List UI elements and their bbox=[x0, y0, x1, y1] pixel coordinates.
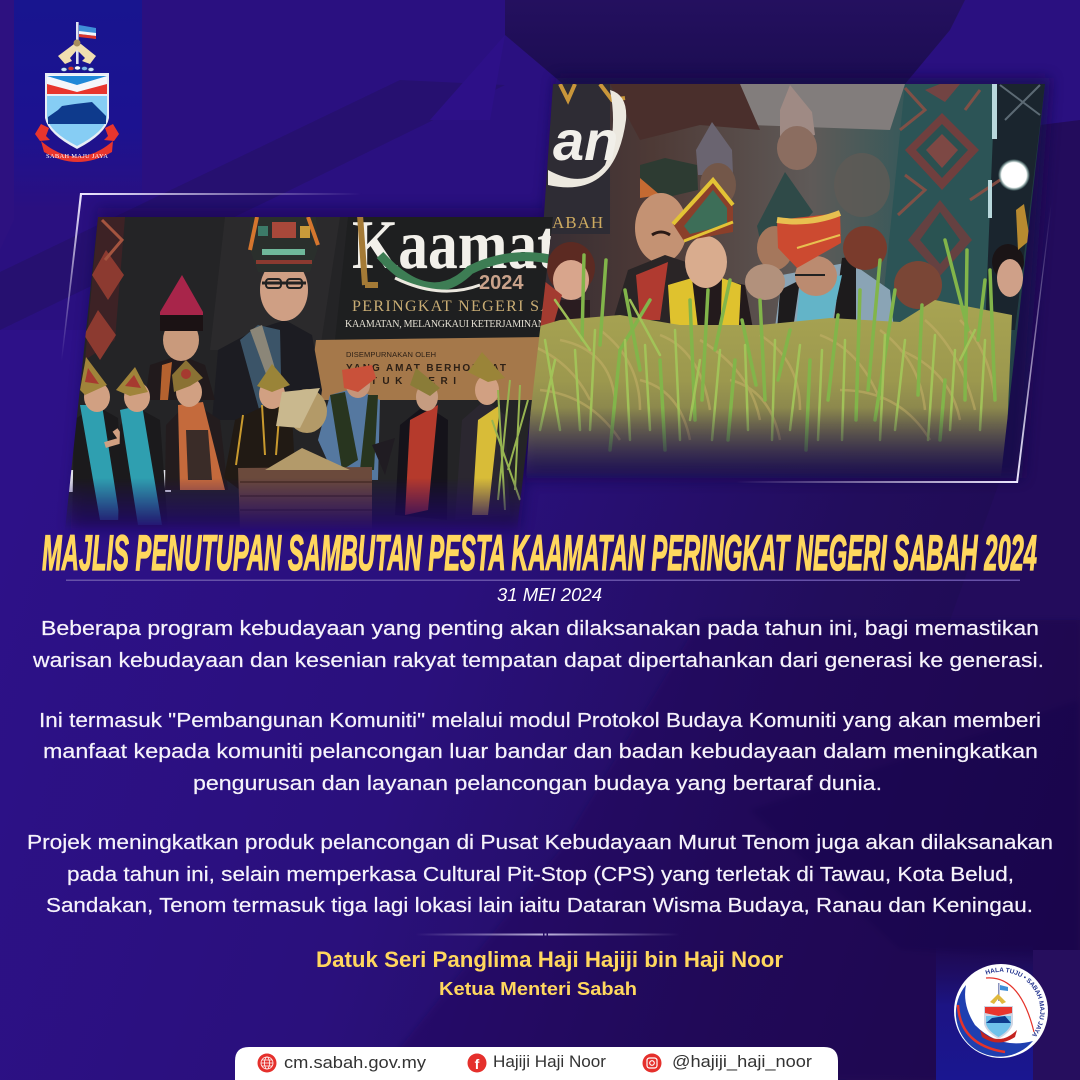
paragraph 2: Ini termasuk "Pembangunan Komuniti" melalui modul Protokol Budaya Komuniti yang akan memberi bbox=[39, 710, 1041, 732]
rice sieve bbox=[276, 388, 327, 433]
left woman bbox=[540, 242, 595, 326]
paragraph 1: Beberapa program kebudayaan yang penting akan dilaksanakan pada tahun ini, bagi memastikan bbox=[41, 618, 1039, 640]
paragraph 3: pada tahun ini, selain memperkasa Cultural Pit-Stop (CPS) yang terletak di Tawau, Kota Belud, bbox=[67, 864, 1014, 886]
paragraph 1: warisan kebudayaan dan kesenian rakyat tempatan dapat dipertahankan dari generasi ke generasi. bbox=[32, 650, 1044, 672]
emblem: Sabah coat of arms bbox=[35, 22, 119, 162]
banner: Kaamat bbox=[352, 207, 557, 284]
banner: DISEMPURNAKAN OLEH bbox=[346, 350, 436, 359]
paragraph 3: Projek meningkatkan produk pelancongan di Pusat Kebudayaan Murut Tenom juga akan dilaksanakan bbox=[27, 832, 1053, 854]
photo: Prime Minister at rice ceremony bbox=[60, 207, 560, 530]
photo shadows bbox=[70, 78, 1050, 530]
photo: frame outline right bbox=[735, 202, 1052, 483]
paragraph 1 bbox=[32, 618, 1044, 672]
rice field bbox=[520, 300, 1012, 480]
facebook text: Hajiji Haji Noor bbox=[493, 1052, 606, 1071]
leader in yellow sash bbox=[668, 177, 752, 325]
title underline bbox=[66, 580, 1020, 581]
screen figure: Prime Minister bbox=[212, 217, 322, 420]
speaker name: Datuk Seri Panglima Haji Hajiji bin Haji Noor bbox=[316, 947, 783, 972]
banner bbox=[314, 217, 551, 400]
stage light bbox=[998, 159, 1030, 191]
photo: rice harvest with leaders bbox=[520, 80, 1050, 480]
footer contact bar bbox=[235, 1047, 838, 1080]
divider bbox=[415, 934, 680, 936]
guest 2 bbox=[116, 367, 168, 530]
instagram text: @hajiji_haji_noor bbox=[672, 1052, 812, 1071]
guest 4 bbox=[224, 364, 295, 490]
banner: KAAMATAN, MELANGKAUI KETERJAMINAN bbox=[345, 319, 545, 330]
screen logo text bbox=[548, 84, 626, 232]
right girl bbox=[992, 204, 1030, 297]
guest 3 bbox=[165, 360, 228, 490]
panel: top-left blue banner bbox=[14, 0, 142, 210]
date: 31 MEI 2024 bbox=[497, 585, 602, 605]
icon: instagram bbox=[642, 1054, 662, 1072]
paragraph 3 bbox=[27, 832, 1053, 917]
banner: 2024 bbox=[479, 272, 524, 294]
rice basket bbox=[238, 448, 372, 530]
paragraph 3: Sandakan, Tenom termasuk tiga lagi lokasi lain iaitu Dataran Wisma Budaya, Ranau dan Keningau. bbox=[46, 895, 1033, 917]
icon: website globe bbox=[258, 1054, 276, 1072]
screen logo text: ABAH bbox=[552, 213, 604, 232]
screen logo text: an bbox=[553, 109, 618, 172]
banner: PERINGKAT NEGERI SA bbox=[352, 298, 552, 315]
guest 7 bbox=[458, 352, 508, 515]
panel: bottom-right blue banner bbox=[936, 945, 1033, 1080]
icon: facebook bbox=[468, 1054, 486, 1072]
paragraph 2: pengurusan dan layanan pelancongan budaya yang bertaraf dunia. bbox=[193, 773, 882, 795]
photo: frame outline left bbox=[61, 193, 362, 362]
screen figures bbox=[610, 85, 890, 340]
leader in batik bbox=[745, 210, 942, 324]
rice stalks bbox=[492, 380, 528, 510]
emblem: Sabah coat of arms: SABAH MAJU JAYA bbox=[46, 153, 108, 160]
guest 1 bbox=[72, 357, 120, 520]
banner: YANG AMAT BERHORMAT bbox=[346, 363, 506, 374]
paragraph 2: manfaat kepada komuniti pelancongan luar bandar dan badan kebudayaan dalam meningkatkan bbox=[43, 741, 1038, 763]
guest 5 pouring bbox=[318, 365, 380, 480]
guest 6 bbox=[372, 368, 448, 520]
badge: Hala Tuju Sabah Maju Jaya bbox=[954, 964, 1048, 1058]
speaker role: Ketua Menteri Sabah bbox=[439, 979, 637, 999]
banner: DATUK SERI bbox=[346, 376, 456, 387]
badge: Hala Tuju Sabah Maju Jaya: HALA TUJU • SABAH MAJU JAYA bbox=[985, 968, 1045, 1036]
icon: facebook: f bbox=[475, 1056, 480, 1072]
textile diamonds bbox=[898, 84, 1000, 276]
screen figure: second man bbox=[145, 275, 215, 400]
website text: cm.sabah.gov.my bbox=[284, 1053, 427, 1072]
paragraph 2 bbox=[39, 710, 1041, 795]
guests on stage bbox=[65, 352, 528, 530]
textile column bbox=[84, 217, 125, 360]
